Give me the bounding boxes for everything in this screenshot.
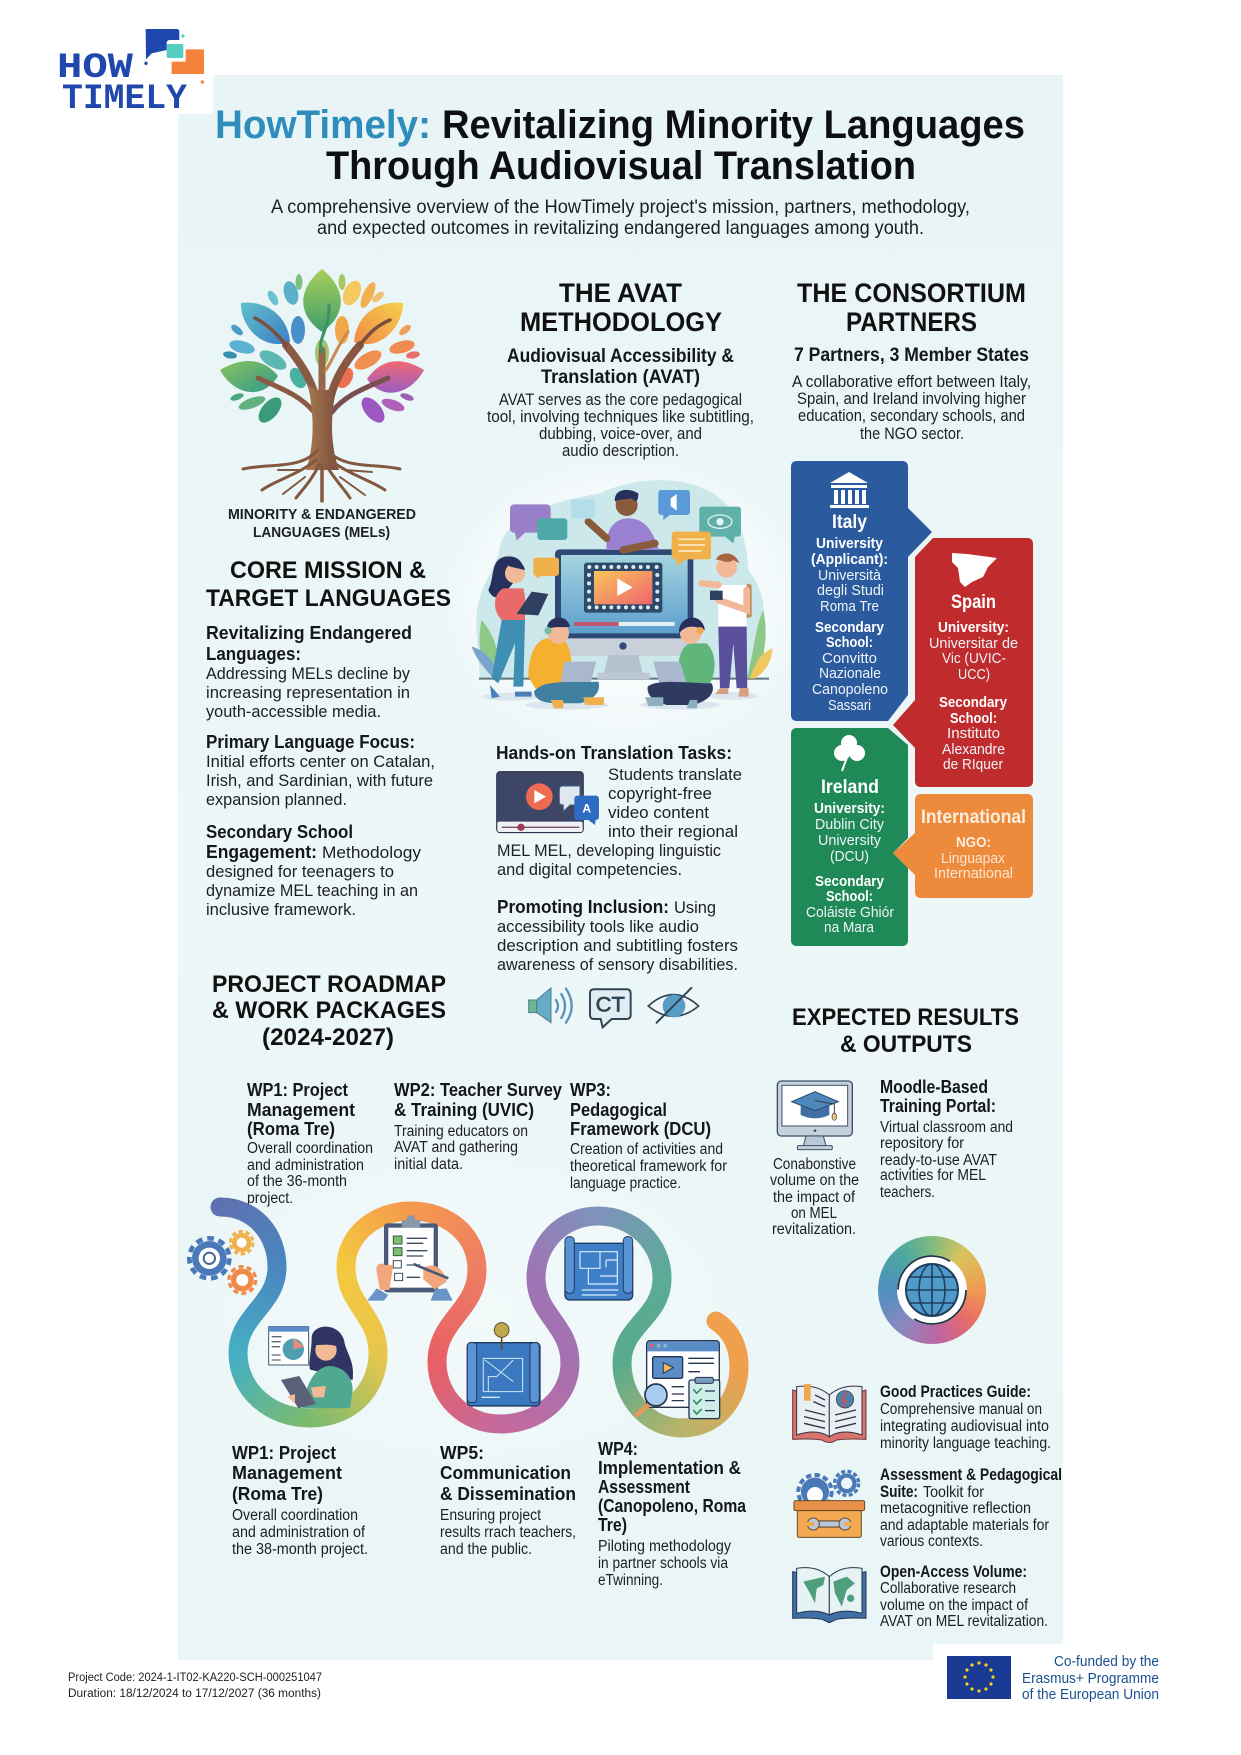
text: WP1 top: Overall coordination: [247, 1140, 373, 1157]
footer: co-funded text: Co-funded by the: [1054, 1654, 1159, 1670]
illustration: students around monitor: [472, 480, 773, 710]
text: good practices guide: Comprehensive manual on: [880, 1401, 1042, 1418]
icon: Spain map: [952, 553, 997, 587]
text: hands-on translation tasks: video content: [608, 803, 709, 822]
footer: project details: Project Code: 2024-1-IT02-KA220-SCH-000251047: [68, 1672, 322, 1684]
text: WP3: Framework (DCU): [570, 1118, 711, 1139]
icon: open book with map: [793, 1568, 866, 1623]
text: open-access volume: AVAT on MEL revitalization.: [880, 1613, 1048, 1630]
subtitle: and expected outcomes in revitalizing endangered languages among youth.: [317, 218, 924, 239]
logo: HowTimely: HOW: [57, 48, 133, 88]
text: WP2: Training educators on: [394, 1123, 528, 1140]
panel: Spain: School:: [950, 710, 997, 727]
footer: co-funded text: of the European Union: [1022, 1687, 1159, 1703]
tree caption: [228, 506, 416, 541]
icon: speaker: [529, 988, 572, 1023]
logo backing: [0, 0, 213, 114]
panel: Italy: Convitto: [822, 650, 877, 667]
text: WP1 top: and administration: [247, 1157, 364, 1174]
text: good practices guide: Good Practices Guide:: [880, 1382, 1031, 1401]
panel: Spain: Instituto: [947, 725, 1000, 742]
text: WP2: AVAT and gathering: [394, 1139, 518, 1156]
title: HowTimely:: [215, 103, 431, 147]
heading: AVAT methodology: [520, 278, 722, 337]
text: primary language focus: Initial efforts center on Catalan,: [206, 752, 435, 771]
tree caption: LANGUAGES (MELs): [253, 524, 390, 541]
panel: Ireland: Dublin City: [815, 816, 884, 833]
icon: captions: [590, 989, 631, 1027]
footer: EU flag: [947, 1656, 1011, 1699]
icon: toolbox with gears: [794, 1471, 865, 1537]
icon: blueprint and globe: [467, 1323, 540, 1406]
text: WP1 bottom: Management: [232, 1462, 342, 1483]
text: promoting inclusion: Using: [674, 898, 716, 917]
title: [215, 103, 1025, 188]
footer logo backing: [933, 1644, 1241, 1755]
text: hands-on translation tasks: into their regional: [608, 822, 738, 841]
panel: International: [893, 794, 1033, 898]
heading: expected results: EXPECTED RESULTS: [792, 1004, 1019, 1031]
panel: Ireland: Secondary: [815, 873, 885, 890]
text: WP4: Tre): [598, 1514, 627, 1535]
text: promoting inclusion: description and subtitling fosters: [497, 936, 738, 955]
heading: AVAT methodology: THE AVAT: [559, 278, 682, 308]
text: WP5: [440, 1442, 576, 1558]
text: promoting inclusion: [497, 897, 738, 974]
panel: Italy: Nazionale: [819, 665, 881, 682]
ribbon backdrop glow: [150, 1120, 790, 1500]
heading: consortium partners: THE CONSORTIUM: [797, 278, 1026, 308]
text: WP4: Implementation &: [598, 1457, 741, 1478]
subheading: AVAT: Audiovisual Accessibility &: [507, 345, 734, 367]
panel: International: International: [921, 807, 1026, 828]
panel: Italy: Secondary: [815, 619, 885, 636]
text: volume caption: the impact of: [773, 1189, 856, 1206]
text: hands-on translation tasks: [496, 743, 742, 879]
text: WP2: & Training (UVIC): [394, 1099, 534, 1120]
text: WP3: [570, 1079, 727, 1192]
text: WP1 bottom: the 38-month project.: [232, 1541, 368, 1558]
text: assessment suite: Assessment & Pedagogical: [880, 1465, 1062, 1484]
icon: woman with tablet: [269, 1327, 353, 1408]
panel: Spain: University:: [938, 619, 1009, 636]
panel: International: NGO:: [956, 834, 991, 851]
text: WP5: results rrach teachers,: [440, 1524, 576, 1541]
text: Moodle portal: [880, 1076, 1013, 1201]
text: secondary school engagement: [206, 822, 422, 919]
heading: project roadmap: & WORK PACKAGES: [212, 997, 446, 1024]
roadmap ribbon: [220, 1207, 739, 1428]
text: WP4: Piloting methodology: [598, 1538, 731, 1555]
text: WP1 top: project.: [247, 1190, 293, 1207]
footer: co-funded text: Erasmus+ Programme: [1022, 1671, 1159, 1687]
text: secondary school engagement: designed for teenagers to: [206, 862, 394, 881]
text: WP5: & Dissemination: [440, 1483, 576, 1504]
icon: crossed eye: [648, 987, 699, 1023]
heading: core mission: TARGET LANGUAGES: [206, 585, 451, 612]
text: secondary school engagement: dynamize MEL teaching in an: [206, 881, 418, 900]
panel: Italy: Italy: [832, 512, 867, 533]
text: AVAT description: AVAT serves as the core pedagogical: [499, 391, 742, 409]
text: revitalizing endangered languages: Languages:: [206, 644, 301, 664]
panel: Italy: University: [816, 535, 884, 552]
logo: HowTimely: [57, 29, 204, 119]
icon: blueprint floorplan: [565, 1237, 633, 1300]
text: WP3: Pedagogical: [570, 1099, 667, 1120]
text: consortium description: Spain, and Ireland involving higher: [797, 390, 1026, 408]
text: WP1 bottom: WP1: Project: [232, 1442, 336, 1463]
icon: institution: [830, 472, 869, 508]
panel: Ireland: University: [818, 832, 881, 849]
heading: expected results: & OUTPUTS: [840, 1031, 972, 1058]
text: primary language focus: Irish, and Sardinian, with future: [206, 771, 433, 790]
illustration backdrop glow: [430, 445, 820, 755]
text: hands-on translation tasks: MEL MEL, developing linguistic: [497, 841, 721, 860]
text: secondary school engagement: Methodology: [322, 843, 422, 862]
title: Revitalizing Minority Languages: [442, 103, 1025, 147]
text: Moodle portal: ready-to-use AVAT: [880, 1152, 997, 1169]
text: WP2: WP2: Teacher Survey: [394, 1079, 563, 1100]
text: WP5: Ensuring project: [440, 1507, 542, 1524]
text: WP1 top: WP1: Project: [247, 1079, 348, 1100]
text: assessment suite: and adaptable materials for: [880, 1517, 1049, 1534]
text: WP3: language practice.: [570, 1175, 681, 1192]
text: volume caption: on MEL: [791, 1205, 837, 1222]
panel: Spain: [893, 538, 1033, 787]
text: WP4: [598, 1438, 747, 1589]
text: open-access volume: Collaborative research: [880, 1580, 1016, 1597]
subtitle: [271, 197, 970, 239]
panel: Spain: de RIquer: [943, 756, 1003, 773]
panel: Italy: Canopoleno: [812, 681, 888, 698]
text: promoting inclusion: accessibility tools like audio: [497, 917, 699, 936]
text: hands-on translation tasks: copyright-free: [608, 784, 712, 803]
panel: Italy: Università: [818, 567, 882, 584]
icon: language tree: [220, 269, 424, 501]
panel: Ireland: Coláiste Ghiór: [806, 904, 894, 921]
text: primary language focus: expansion planned.: [206, 790, 347, 809]
panel: Spain: Secondary: [939, 694, 1008, 711]
icon: open manual: [793, 1384, 866, 1442]
text: WP1 top: (Roma Tre): [247, 1118, 335, 1139]
heading: core mission: [206, 557, 451, 612]
text: WP4: eTwinning.: [598, 1572, 663, 1589]
panel: Ireland: na Mara: [824, 919, 875, 936]
text: AVAT description: tool, involving techniques like subtitling,: [487, 408, 754, 426]
text: revitalizing endangered languages: Addressing MELs decline by: [206, 664, 410, 683]
text: WP1 bottom: Overall coordination: [232, 1507, 358, 1524]
text: Moodle portal: teachers.: [880, 1184, 935, 1201]
panel: Italy: degli Studi: [817, 582, 884, 599]
panel: Spain: UCC): [958, 666, 990, 683]
panel: Italy: [791, 461, 932, 721]
panel: Ireland: (DCU): [830, 848, 869, 865]
logo: HowTimely: TIMELY: [62, 79, 187, 119]
subheading: AVAT: Translation (AVAT): [541, 366, 700, 388]
icon: shamrock: [834, 735, 865, 771]
text: WP1 top: of the 36-month: [247, 1173, 347, 1190]
text: promoting inclusion: awareness of sensory disabilities.: [497, 955, 738, 974]
text: consortium description: the NGO sector.: [860, 425, 964, 443]
text: consortium description: A collaborative effort between Italy,: [792, 373, 1031, 391]
text: WP1 top: [247, 1079, 373, 1207]
text: hands-on translation tasks: and digital competencies.: [497, 860, 682, 879]
text: WP1 bottom: (Roma Tre): [232, 1483, 323, 1504]
text: volume caption: [770, 1156, 859, 1238]
icon: captions: CT: [596, 993, 625, 1017]
text: assessment suite: metacognitive reflection: [880, 1500, 1031, 1517]
text: WP3: Creation of activities and: [570, 1141, 723, 1158]
text: promoting inclusion: Promoting Inclusion:: [497, 897, 669, 917]
panel: Spain: Universitar de: [929, 635, 1018, 652]
icons: accessibility: [529, 987, 699, 1027]
heading: project roadmap: (2024-2027): [262, 1024, 394, 1051]
icon: video translation: [497, 772, 599, 833]
subheading: AVAT: [507, 345, 734, 388]
text: WP3: WP3:: [570, 1079, 611, 1100]
heading: AVAT methodology: METHODOLOGY: [520, 307, 722, 337]
footer: project details: Duration: 18/12/2024 to 17/12/2027 (36 months): [68, 1688, 321, 1700]
text: good practices guide: minority language teaching.: [880, 1435, 1051, 1452]
panel: Italy: Roma Tre: [820, 598, 879, 615]
text: AVAT description: [487, 391, 754, 460]
text: WP1 top: Management: [247, 1099, 355, 1120]
text: WP5: Communication: [440, 1462, 571, 1483]
text: volume caption: volume on the: [770, 1172, 859, 1189]
text: Moodle portal: Training Portal:: [880, 1095, 996, 1116]
panel: Ireland: University:: [814, 800, 885, 817]
text: assessment suite: various contexts.: [880, 1533, 983, 1550]
heading: consortium partners: PARTNERS: [846, 307, 977, 337]
text: WP1 bottom: and administration of: [232, 1524, 366, 1541]
text: secondary school engagement: inclusive framework.: [206, 900, 356, 919]
subtitle: A comprehensive overview of the HowTimely project's mission, partners, methodology,: [271, 197, 970, 218]
text: assessment suite: [880, 1465, 1062, 1550]
text: secondary school engagement: Secondary School: [206, 822, 353, 842]
heading: consortium partners: [797, 278, 1026, 337]
text: WP5: and the public.: [440, 1541, 532, 1558]
text: secondary school engagement: Engagement:: [206, 842, 317, 862]
text: WP4: in partner schools via: [598, 1555, 728, 1572]
tree caption: MINORITY & ENDANGERED: [228, 506, 416, 523]
text: Moodle portal: Virtual classroom and: [880, 1119, 1013, 1136]
panel: Ireland: School:: [826, 888, 873, 905]
text: consortium description: [792, 373, 1031, 443]
text: open-access volume: [880, 1562, 1048, 1630]
text: revitalizing endangered languages: [206, 623, 412, 721]
text: good practices guide: [880, 1382, 1051, 1452]
panel: International: International: [934, 865, 1013, 882]
icon: web page with review: [637, 1341, 720, 1419]
text: Moodle portal: activities for MEL: [880, 1167, 986, 1184]
text: WP3: theoretical framework for: [570, 1158, 727, 1175]
text: primary language focus: Primary Language Focus:: [206, 732, 415, 752]
text: consortium description: education, secondary schools, and: [798, 407, 1025, 425]
panel: Spain: Alexandre: [942, 741, 1005, 758]
text: WP2: [394, 1079, 563, 1173]
text: WP4: Assessment: [598, 1476, 690, 1497]
icon: clipboard and hands: [367, 1215, 453, 1301]
panel: Italy: (Applicant):: [811, 551, 888, 568]
heading: expected results: [792, 1004, 1019, 1058]
panel: International: Linguapax: [941, 850, 1005, 867]
text: AVAT description: audio description.: [562, 442, 679, 460]
text: volume caption: Conabonstive: [773, 1156, 856, 1173]
panel: Spain: Vic (UVIC-: [942, 650, 1006, 667]
heading: project roadmap: [212, 971, 446, 1051]
text: open-access volume: Open-Access Volume:: [880, 1562, 1027, 1581]
text: assessment suite: Suite:: [880, 1482, 918, 1501]
panel: Ireland: [791, 728, 908, 946]
title: Through Audiovisual Translation: [326, 144, 916, 188]
icon: globe ring: [878, 1236, 986, 1344]
icon: monitor with graduation cap: [777, 1081, 852, 1150]
icon: gears: [189, 1231, 256, 1293]
heading: project roadmap: PROJECT ROADMAP: [212, 971, 446, 998]
text: AVAT description: dubbing, voice-over, and: [539, 425, 702, 443]
text: revitalizing endangered languages: Revitalizing Endangered: [206, 623, 412, 643]
subheading: partners count: 7 Partners, 3 Member States: [794, 344, 1029, 366]
text: Moodle portal: Moodle-Based: [880, 1076, 988, 1097]
text: WP5: WP5:: [440, 1442, 484, 1463]
panel: Spain: Spain: [951, 592, 996, 613]
panel: Italy: Sassari: [828, 697, 871, 714]
text: revitalizing endangered languages: increasing representation in: [206, 683, 410, 702]
text: WP4: (Canopoleno, Roma: [598, 1495, 747, 1516]
text: volume caption: revitalization.: [772, 1221, 856, 1238]
text: revitalizing endangered languages: youth-accessible media.: [206, 702, 381, 721]
text: good practices guide: integrating audiovisual into: [880, 1418, 1049, 1435]
page background panel: [178, 75, 1063, 1660]
text: assessment suite: Toolkit for: [923, 1484, 984, 1501]
text: WP4: WP4:: [598, 1438, 638, 1459]
heading: core mission: CORE MISSION &: [230, 557, 426, 584]
footer: co-funded text: [1022, 1654, 1159, 1703]
text: WP2: initial data.: [394, 1156, 463, 1173]
panel: Italy: School:: [826, 634, 873, 651]
text: hands-on translation tasks: Hands-on Translation Tasks:: [496, 743, 732, 763]
icon: video translation: A: [582, 802, 591, 816]
text: primary language focus: [206, 732, 435, 809]
text: WP1 bottom: [232, 1442, 368, 1558]
text: hands-on translation tasks: Students translate: [608, 765, 742, 784]
text: open-access volume: volume on the impact of: [880, 1597, 1029, 1614]
panel: Ireland: Ireland: [821, 777, 879, 798]
footer: project details: [68, 1672, 322, 1700]
text: Moodle portal: repository for: [880, 1135, 964, 1152]
